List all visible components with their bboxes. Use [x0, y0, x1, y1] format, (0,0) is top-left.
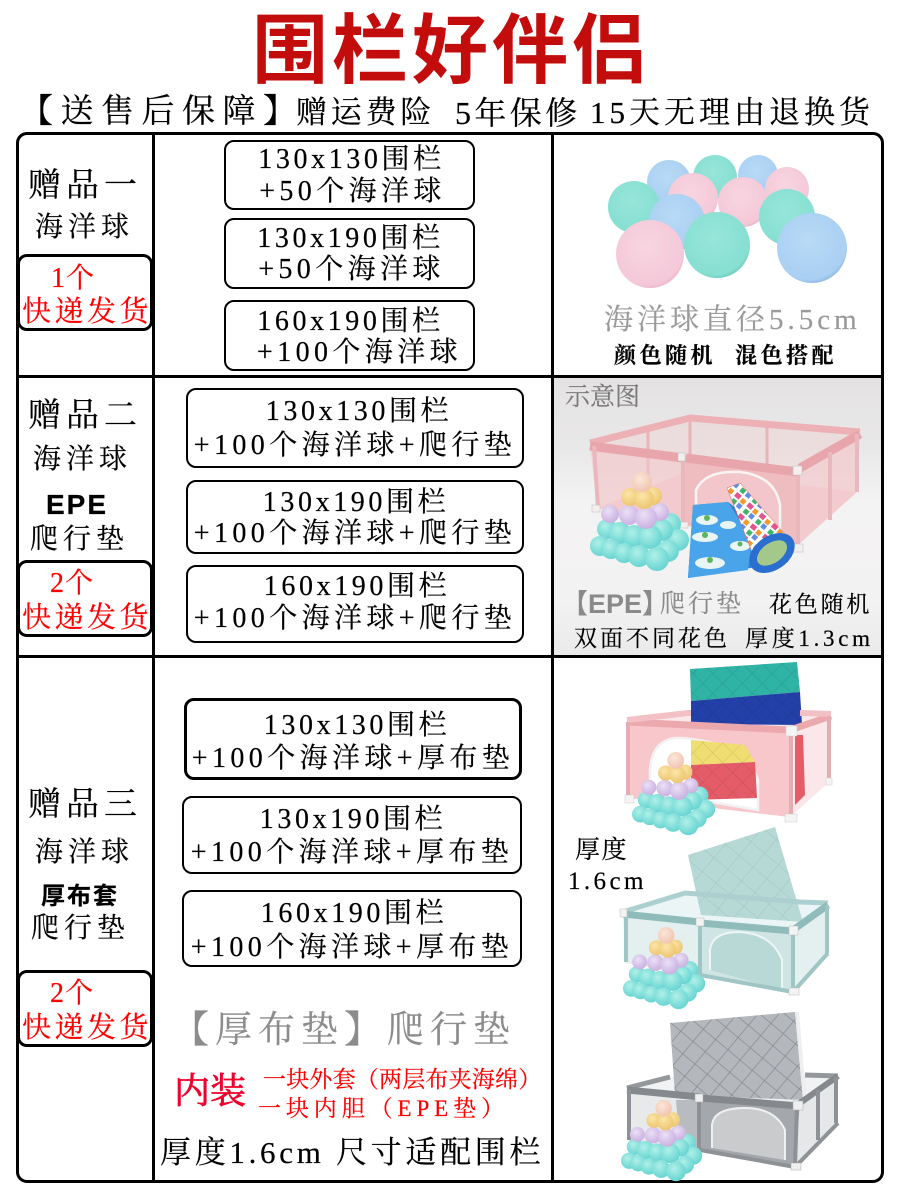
- option: 130x130: [184, 698, 522, 780]
- text: express delivery: 快递发货: [22, 602, 152, 634]
- text: express delivery: 快递发货: [22, 296, 152, 328]
- caption: random pattern: 花色随机: [769, 592, 872, 617]
- option: 160x190: 160x190围栏: [257, 306, 444, 337]
- text: parcel count: 2个: [50, 568, 94, 599]
- option: 160x190: +100个海洋球+爬行垫: [194, 603, 516, 634]
- caption: EPE crawling mat: [561, 589, 744, 619]
- panel: ocean balls photo: [604, 155, 861, 368]
- text: contents label: 内装: [174, 1071, 246, 1111]
- option: 130x130: 130x130围栏: [258, 144, 445, 175]
- panel: gift three label column: [19, 787, 152, 1047]
- option: 130x190: 130x190围栏: [263, 487, 449, 518]
- caption: ball diameter: 海洋球直径5.5cm: [604, 304, 861, 336]
- panel: EPE mat photo: [554, 378, 881, 655]
- callout: 1 parcel shipping: [17, 254, 153, 331]
- text: crawling mat: 爬行垫: [30, 524, 129, 555]
- option: 130x130: [224, 140, 475, 210]
- option: 160x190: +100个海洋球+厚布垫: [191, 932, 513, 963]
- text: inner core: 一块内胆（EPE垫）: [258, 1096, 509, 1121]
- illustration: ocean balls: [608, 155, 847, 288]
- caption: thickness: 厚度1.3cm: [745, 626, 874, 651]
- text: thick fabric cover: 厚布套: [41, 883, 119, 910]
- option: 130x190: [224, 218, 475, 289]
- after-sales guarantee line: 5年保修: [455, 95, 581, 131]
- option: 130x130: [186, 388, 524, 468]
- caption: 1.6cm: 1.6cm: [568, 868, 647, 895]
- caption: EPE crawling mat: 爬行垫: [660, 591, 744, 618]
- option: 130x130: +50个海洋球: [259, 176, 446, 207]
- option: 130x190: +50个海洋球: [258, 254, 445, 285]
- panel: gift one options: [224, 140, 475, 371]
- option: 160x190: [186, 565, 524, 643]
- text: ocean balls: 海洋球: [35, 212, 134, 243]
- option: 160x190: [182, 890, 522, 967]
- panel: thick mat photos: [568, 662, 840, 1182]
- text: outer cover: 一块外套（两层布夹海绵）: [263, 1067, 541, 1092]
- option: 130x130: +100个海洋球+爬行垫: [194, 430, 516, 461]
- after-sales guarantee line: 赠运费险: [296, 95, 435, 130]
- heading: gift one: 赠品一: [28, 168, 142, 204]
- illustration: teal playpen with mat: [620, 827, 830, 1010]
- heading: thick fabric mat: 【厚布垫】爬行垫: [172, 1010, 516, 1051]
- caption: EPE crawling mat: 【EPE】: [561, 589, 669, 619]
- caption: random colours: 颜色随机: [614, 343, 716, 368]
- option: 160x190: 160x190围栏: [261, 898, 447, 929]
- option: 130x130: +100个海洋球+厚布垫: [192, 743, 514, 774]
- panel: gift one label column: [19, 168, 152, 331]
- caption: mixed colours: 混色搭配: [735, 343, 837, 368]
- callout: 2 parcels shipping: [17, 970, 153, 1047]
- illustration: grey playpen with mat: [621, 1012, 840, 1182]
- option: 160x190: +100个海洋球: [257, 337, 462, 368]
- text: parcel count: 2个: [50, 978, 94, 1009]
- caption: thickness: 厚度: [575, 837, 628, 864]
- option: 130x130: 130x130围栏: [264, 710, 450, 741]
- option: 130x190: 130x190围栏: [260, 804, 446, 835]
- title: 围栏好伴侣: [252, 9, 652, 94]
- text: ocean balls: 海洋球: [35, 837, 134, 868]
- after-sales guarantee line: [20, 94, 874, 131]
- text: EPE: EPE: [46, 489, 108, 520]
- heading: gift three: 赠品三: [28, 787, 142, 823]
- option: 160x190: [224, 300, 475, 371]
- option: 130x190: [186, 480, 524, 554]
- panel: gift three options: [160, 698, 544, 1170]
- after-sales guarantee line: 15天无理由退换货: [590, 95, 874, 130]
- option: 130x190: [182, 796, 522, 874]
- option: 130x190: +100个海洋球+爬行垫: [194, 518, 516, 549]
- text: crawling mat: 爬行垫: [31, 913, 130, 944]
- option: 130x190: 130x190围栏: [257, 223, 444, 254]
- callout: 2 parcels shipping: [17, 560, 153, 637]
- heading: gift two: 赠品二: [28, 398, 142, 434]
- after-sales guarantee line: 【送售后保障】: [20, 94, 304, 130]
- text: thickness and fit: 厚度1.6cm 尺寸适配围栏: [160, 1135, 544, 1170]
- panel: gift two label column: [19, 398, 152, 637]
- text: ocean balls: 海洋球: [33, 444, 132, 475]
- illustration: pink playpen with balls and EPE mat: [589, 414, 862, 578]
- text: express delivery: 快递发货: [22, 1012, 152, 1044]
- panel: gift two options: [186, 388, 524, 643]
- caption: schematic: 示意图: [565, 384, 640, 411]
- option: 160x190: 160x190围栏: [264, 571, 450, 602]
- text: parcel count: 1个: [51, 263, 95, 294]
- option: 130x130: 130x130围栏: [266, 396, 452, 427]
- caption: double-sided: 双面不同花色: [574, 626, 730, 651]
- option: 130x190: +100个海洋球+厚布垫: [191, 837, 513, 868]
- illustration: pink playpen with colour mat: [624, 662, 832, 836]
